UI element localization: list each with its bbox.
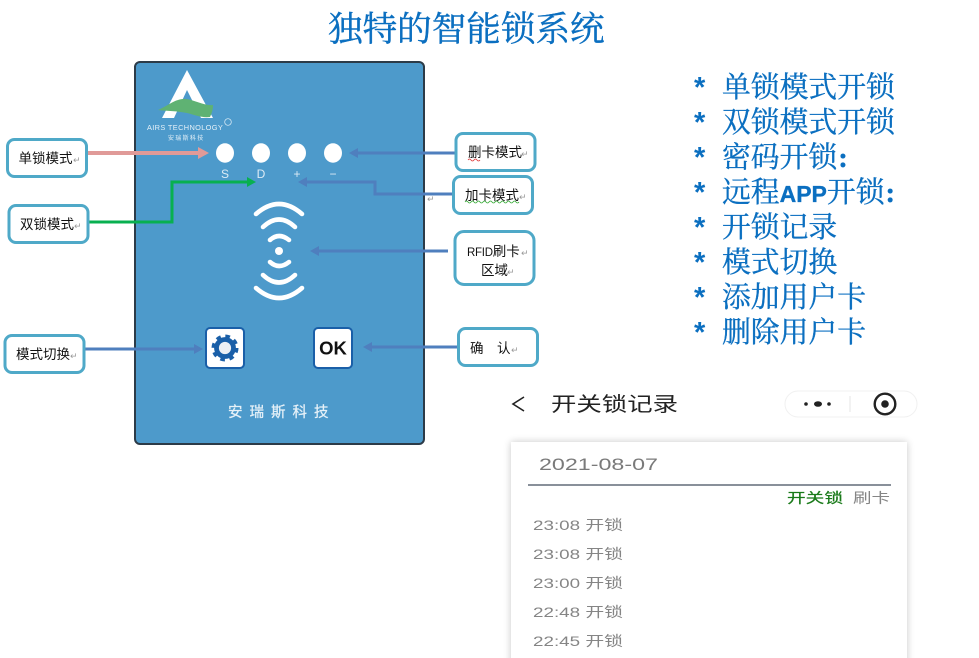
indicator lights xyxy=(216,143,342,163)
callout: mode switch: 模式切换 xyxy=(16,347,70,362)
callout: single lock mode xyxy=(8,140,86,176)
callout: double lock mode xyxy=(9,206,88,242)
indicator labels: D xyxy=(257,167,266,181)
callout: RFID zone: 区域 xyxy=(481,263,508,278)
list bullets xyxy=(694,72,706,349)
title: 独特的智能锁系统 xyxy=(328,11,605,49)
indicator labels xyxy=(221,167,337,181)
list bullets: * xyxy=(694,177,706,209)
callout: delete card mode xyxy=(456,134,535,170)
card shadow xyxy=(511,442,907,658)
list bullets: * xyxy=(694,142,706,174)
indicator labels: + xyxy=(293,167,301,181)
icon: company logo: AIRS TECHNOLOGY xyxy=(147,123,223,132)
arrow: RFID zone xyxy=(310,246,448,256)
list items: 密码开锁: xyxy=(722,142,848,174)
callout: confirm xyxy=(458,328,538,366)
list bullets: * xyxy=(694,72,706,104)
indicator labels: S xyxy=(221,167,229,181)
record card xyxy=(511,442,907,658)
list items: 开锁记录 xyxy=(722,212,837,244)
list bullets: * xyxy=(694,212,706,244)
arrow: double lock mode xyxy=(88,177,256,222)
callout: mode switch: ↵ xyxy=(70,352,78,362)
list items: 删除用户卡 xyxy=(722,317,866,349)
callout: RFID zone xyxy=(455,232,534,284)
arrow: delete card mode xyxy=(349,148,456,158)
callout: delete card mode: 删卡模式 xyxy=(468,145,522,160)
callout: confirm: 确 xyxy=(470,341,484,356)
callout: confirm: ↵ xyxy=(511,346,519,356)
date: 2021-08-07 xyxy=(539,455,658,474)
record rows: 22:48 开锁 xyxy=(533,604,623,620)
callout: confirm: 认 xyxy=(497,341,511,356)
record rows: 23:08 开锁 xyxy=(533,517,623,533)
list bullets: * xyxy=(694,107,706,139)
arrow: confirm xyxy=(363,342,458,352)
button: settings gear xyxy=(206,328,244,368)
button: OK: OK xyxy=(319,338,348,358)
callout: mode switch xyxy=(5,336,84,372)
callout: add card mode: ↵ xyxy=(519,193,527,203)
callout: double lock mode: ↵ xyxy=(74,222,82,232)
list items: 添加用户卡 xyxy=(722,282,866,314)
callout: RFID zone: ↵ xyxy=(507,268,515,278)
icon: company logo xyxy=(147,70,231,142)
icon: RFID waves xyxy=(256,204,302,298)
stray return mark: ↵ xyxy=(427,195,435,205)
capsule menu xyxy=(785,391,917,417)
device body xyxy=(135,62,424,444)
button: OK xyxy=(314,328,352,368)
record rows: 23:08 开锁 xyxy=(533,546,623,562)
callout: single lock mode: 单锁模式 xyxy=(18,151,73,166)
list items: 远程APP开锁: xyxy=(722,177,895,209)
list items: 单锁模式开锁 xyxy=(722,72,896,104)
list bullets: * xyxy=(694,282,706,314)
icon: company logo: 安瑞斯科技 xyxy=(168,134,205,142)
arrow: add card mode xyxy=(298,177,453,194)
tab: card swipe: 刷卡 xyxy=(853,490,890,506)
callout: RFID zone: RFID刷卡 xyxy=(467,244,520,259)
brand name: 安瑞斯科技 xyxy=(228,404,336,421)
callout: add card mode xyxy=(454,176,532,214)
arrow: single lock mode xyxy=(87,147,209,159)
list bullets: * xyxy=(694,247,706,279)
panel: unlock record screenshot xyxy=(511,391,917,658)
record rows: 23:00 开锁 xyxy=(533,575,623,591)
callout: delete card mode: ↵ xyxy=(521,150,529,160)
feature list xyxy=(694,72,896,349)
record rows: 22:45 开锁 xyxy=(533,633,623,649)
indicator labels: − xyxy=(329,167,337,181)
callout: double lock mode: 双锁模式 xyxy=(20,217,74,232)
list bullets: * xyxy=(694,317,706,349)
list items xyxy=(722,72,896,349)
callout: single lock mode: ↵ xyxy=(73,156,81,166)
callout: add card mode: 加卡模式 xyxy=(465,188,519,203)
list items: 双锁模式开锁 xyxy=(722,107,896,139)
list items: 模式切换 xyxy=(722,247,837,279)
panel: lock device xyxy=(135,62,424,444)
callout: RFID zone: ↵ xyxy=(521,249,529,259)
record rows xyxy=(533,517,623,649)
tab: open and close lock: 开关锁 xyxy=(787,490,843,506)
screen title: 开关锁记录 xyxy=(551,393,678,416)
back arrow xyxy=(513,397,524,411)
arrow: mode switch xyxy=(84,344,203,354)
